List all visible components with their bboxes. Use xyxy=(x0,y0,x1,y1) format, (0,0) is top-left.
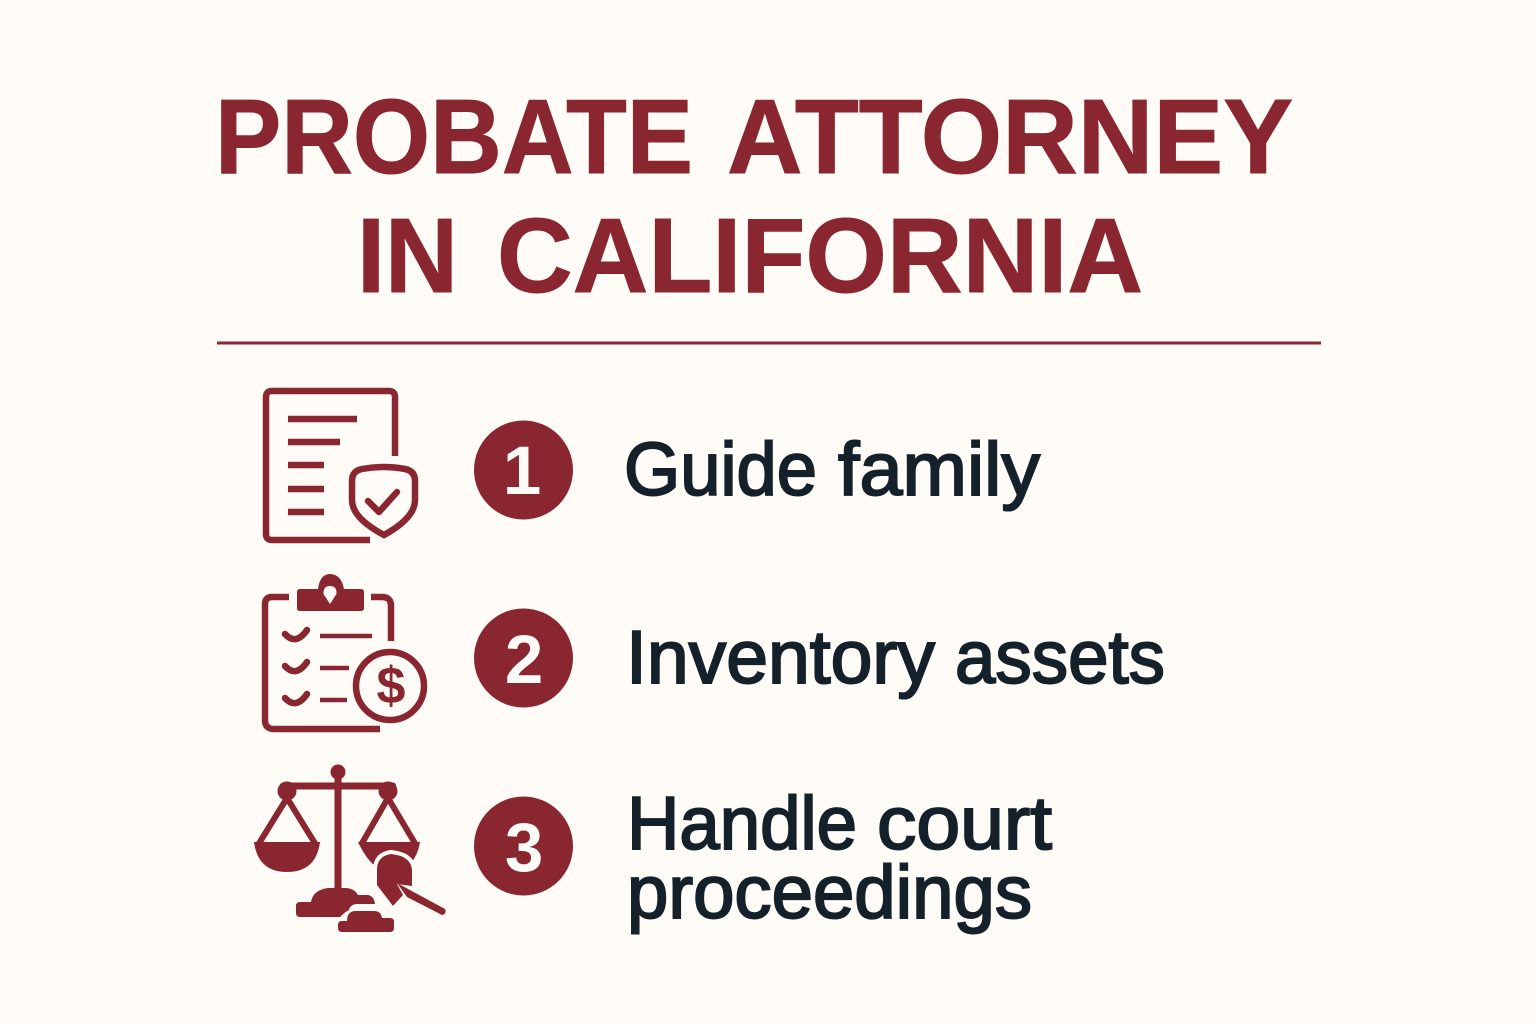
step 2 label: Inventory xyxy=(626,615,935,699)
step 3 label: proceedings xyxy=(627,850,1032,934)
step 1 label: family xyxy=(838,427,1041,511)
icon: clipboard with dollar coin: $ xyxy=(377,657,406,715)
icon: clipboard with dollar coin xyxy=(265,574,424,729)
step 1 label: Guide xyxy=(624,427,817,511)
title xyxy=(215,78,1293,315)
step 1 number badge: 1 xyxy=(503,432,541,509)
step 1 number badge xyxy=(474,420,573,520)
step 3 number badge: 3 xyxy=(505,809,543,886)
title: IN xyxy=(357,197,458,315)
step 2 label xyxy=(626,615,1165,699)
title: PROBATE xyxy=(215,78,693,196)
step 3 label: court xyxy=(877,781,1052,865)
step 2 label: assets xyxy=(955,615,1165,699)
step 3 label xyxy=(627,781,1052,934)
step 3 number badge xyxy=(474,796,573,896)
icon: scales of justice with gavel xyxy=(254,764,446,932)
title: ATTORNEY xyxy=(727,78,1293,196)
step 2 number badge xyxy=(474,608,573,708)
step 1 label xyxy=(624,427,1041,511)
step 2 number badge: 2 xyxy=(505,621,543,698)
title: CALIFORNIA xyxy=(497,197,1143,315)
step 3 label: Handle xyxy=(627,781,857,865)
icon: document with shield xyxy=(266,391,415,540)
